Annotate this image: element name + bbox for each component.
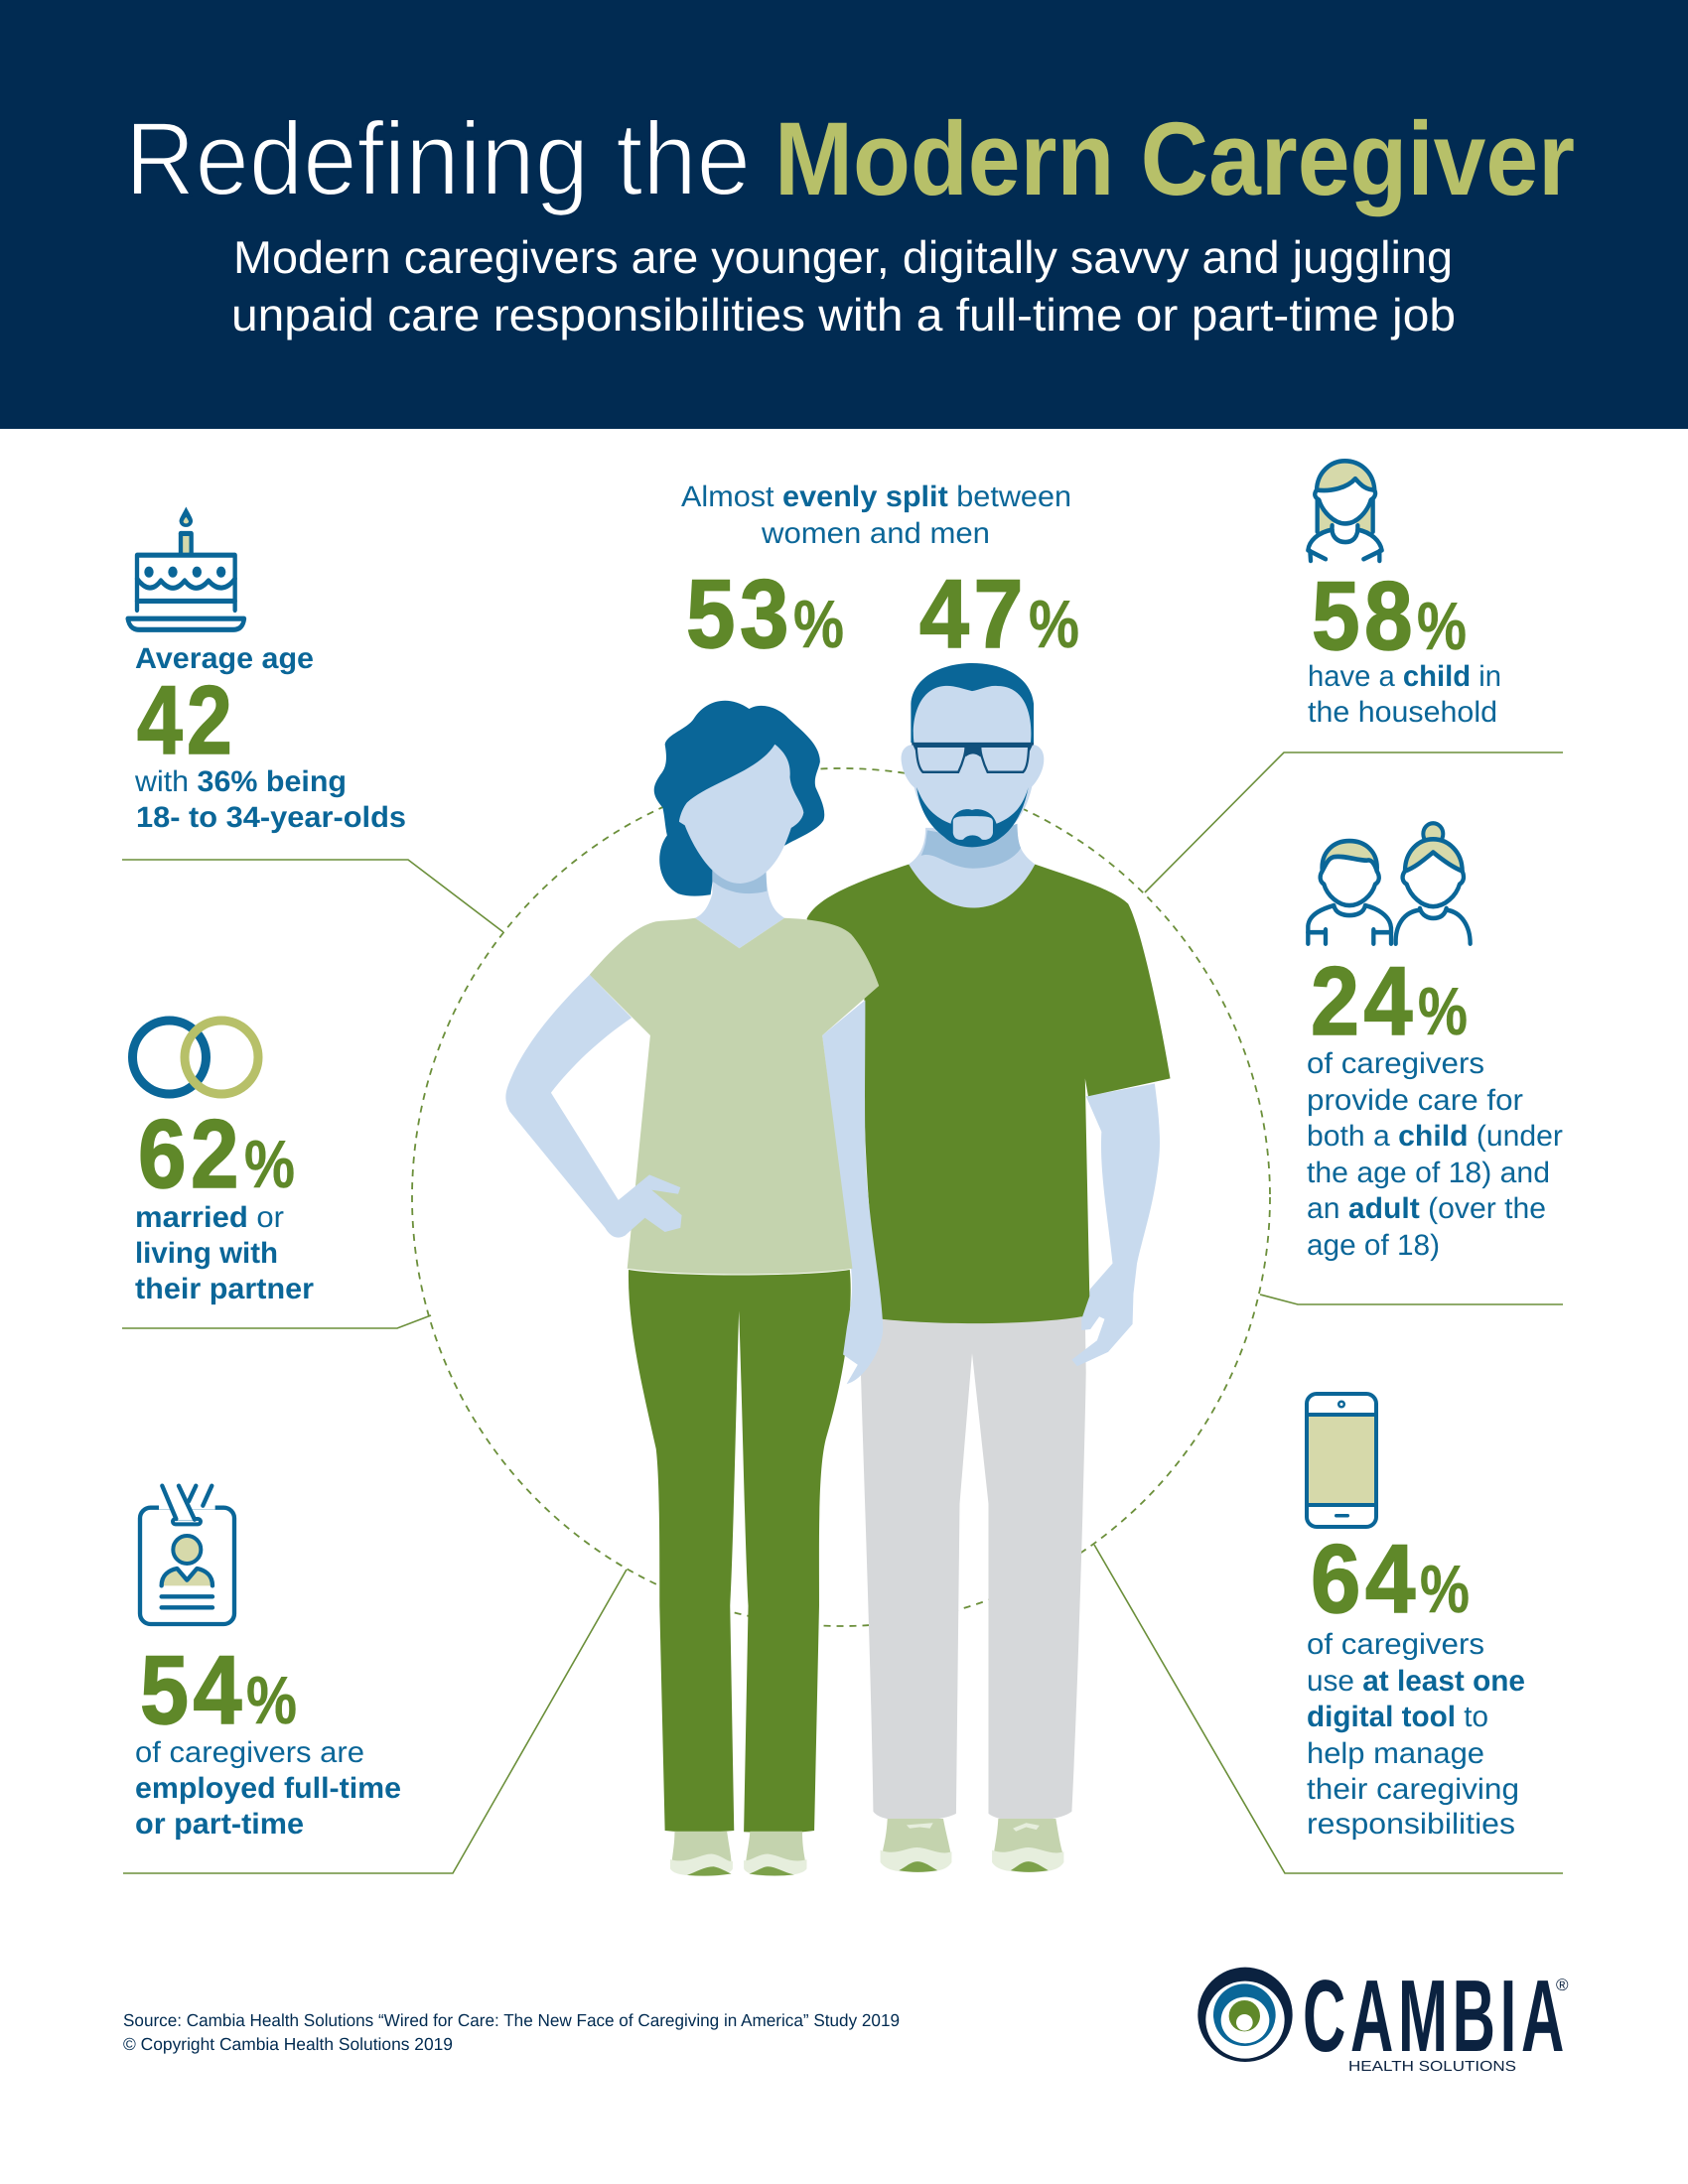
child and adult text: age of 18) — [1307, 1229, 1440, 1262]
child and adult text: the age of 18) and — [1307, 1157, 1550, 1189]
title — [125, 101, 1575, 217]
title: Redefining the — [125, 101, 751, 217]
child and adult text: of caregivers — [1307, 1047, 1484, 1080]
24 percent: 24 — [1311, 946, 1417, 1055]
footer source text — [123, 2010, 900, 2054]
panel: child and adult — [1307, 823, 1563, 1262]
digital tool text: use at least one — [1307, 1665, 1525, 1698]
icon: smartphone — [1307, 1394, 1376, 1527]
logo tagline: HEALTH SOLUTIONS — [1348, 2059, 1516, 2075]
married text — [135, 1201, 315, 1305]
man trousers — [861, 1317, 1086, 1821]
child and adult text: provide care for — [1307, 1084, 1523, 1117]
connector lines — [122, 752, 1563, 1873]
54 percent: 54 — [140, 1635, 246, 1744]
woman neck — [695, 871, 784, 948]
gender text: Almost evenly split between — [681, 480, 1071, 513]
man glasses — [912, 744, 1034, 772]
man arm and hand — [1071, 1084, 1160, 1366]
child text — [1308, 660, 1501, 729]
man hair — [911, 663, 1034, 743]
child text: have a child in — [1308, 660, 1501, 693]
married text: living with — [135, 1237, 278, 1270]
man neck — [909, 828, 1035, 907]
panel: child in household — [1308, 461, 1501, 729]
figure: woman — [505, 701, 883, 1876]
woman hair — [654, 701, 824, 896]
woman shirt — [590, 918, 879, 1274]
58 percent: % — [1417, 589, 1467, 664]
62 percent: 62 — [138, 1099, 243, 1208]
age detail: 18- to 34-year-olds — [136, 801, 406, 834]
logo mark — [1197, 1968, 1293, 2062]
age detail — [134, 765, 406, 834]
married text: married or — [135, 1201, 284, 1234]
child and adult text: both a child (under — [1307, 1120, 1563, 1153]
62 percent: % — [244, 1127, 295, 1202]
icon: id badge — [140, 1486, 234, 1624]
58 percent: 58 — [1312, 561, 1417, 670]
age detail: with 36% being — [134, 765, 347, 798]
47 percent: 47 — [919, 559, 1028, 668]
47 percent: % — [1029, 587, 1079, 662]
woman face — [679, 745, 803, 884]
woman trousers — [629, 1270, 851, 1833]
man shirt — [806, 865, 1171, 1323]
child and adult text: an adult (over the — [1307, 1192, 1546, 1225]
icon: child and adult — [1308, 823, 1471, 944]
gender text — [681, 480, 1071, 550]
digital tool text — [1307, 1628, 1525, 1841]
24 percent: % — [1418, 974, 1468, 1049]
man shoes — [881, 1819, 1063, 1872]
digital tool text: digital tool to — [1307, 1701, 1488, 1733]
digital tool text: responsibilities — [1307, 1808, 1515, 1841]
panel: average age — [128, 507, 406, 834]
digital tool text: help manage — [1307, 1737, 1484, 1770]
employed text: employed full-time — [135, 1772, 401, 1805]
subtitle: unpaid care responsibilities with a full-time or part-time job — [231, 289, 1456, 341]
woman shoes — [670, 1832, 806, 1876]
53 percent: 53 — [686, 559, 793, 668]
dashed circle — [412, 768, 1270, 1626]
digital tool text: their caregiving — [1307, 1773, 1519, 1806]
man beard — [916, 787, 1029, 847]
child and adult text — [1307, 1047, 1563, 1262]
64 percent: 64 — [1311, 1524, 1420, 1633]
64 percent: % — [1420, 1552, 1470, 1627]
man neck shadow — [921, 824, 1021, 869]
title: Modern Caregiver — [774, 101, 1575, 217]
53 percent: % — [793, 587, 844, 662]
panel: married — [133, 1021, 315, 1305]
digital tool text: of caregivers — [1307, 1628, 1484, 1661]
figure: man — [806, 663, 1171, 1872]
panel: digital tool — [1307, 1394, 1525, 1841]
woman neck shadow — [712, 869, 767, 893]
employed text: or part-time — [135, 1808, 304, 1841]
center stat: gender split — [681, 480, 1079, 668]
age label: Average age — [135, 642, 314, 675]
icon: linked rings — [133, 1021, 258, 1094]
employed text: of caregivers are — [135, 1736, 364, 1769]
subtitle — [231, 231, 1456, 341]
gender text: women and men — [761, 517, 990, 550]
panel: employed — [135, 1486, 401, 1841]
employed text — [135, 1736, 401, 1841]
footer source text: © Copyright Cambia Health Solutions 2019 — [123, 2034, 453, 2054]
child text: the household — [1308, 696, 1497, 729]
woman arm down — [822, 1000, 883, 1384]
age number: 42 — [137, 665, 236, 774]
icon: birthday cake — [128, 507, 244, 629]
subtitle: Modern caregivers are younger, digitally savvy and juggling — [233, 231, 1453, 283]
footer source text: Source: Cambia Health Solutions “Wired for Care: The New Face of Caregiving in America” Study 2019 — [123, 2010, 900, 2030]
woman arm on hip — [505, 975, 682, 1238]
54 percent: % — [246, 1663, 297, 1738]
icon: woman — [1308, 461, 1382, 561]
married text: their partner — [135, 1273, 315, 1305]
registered mark: ® — [1556, 1976, 1569, 1994]
header banner — [0, 0, 1688, 429]
logo: Cambia Health Solutions — [1197, 1959, 1569, 2075]
man head — [902, 663, 1044, 847]
